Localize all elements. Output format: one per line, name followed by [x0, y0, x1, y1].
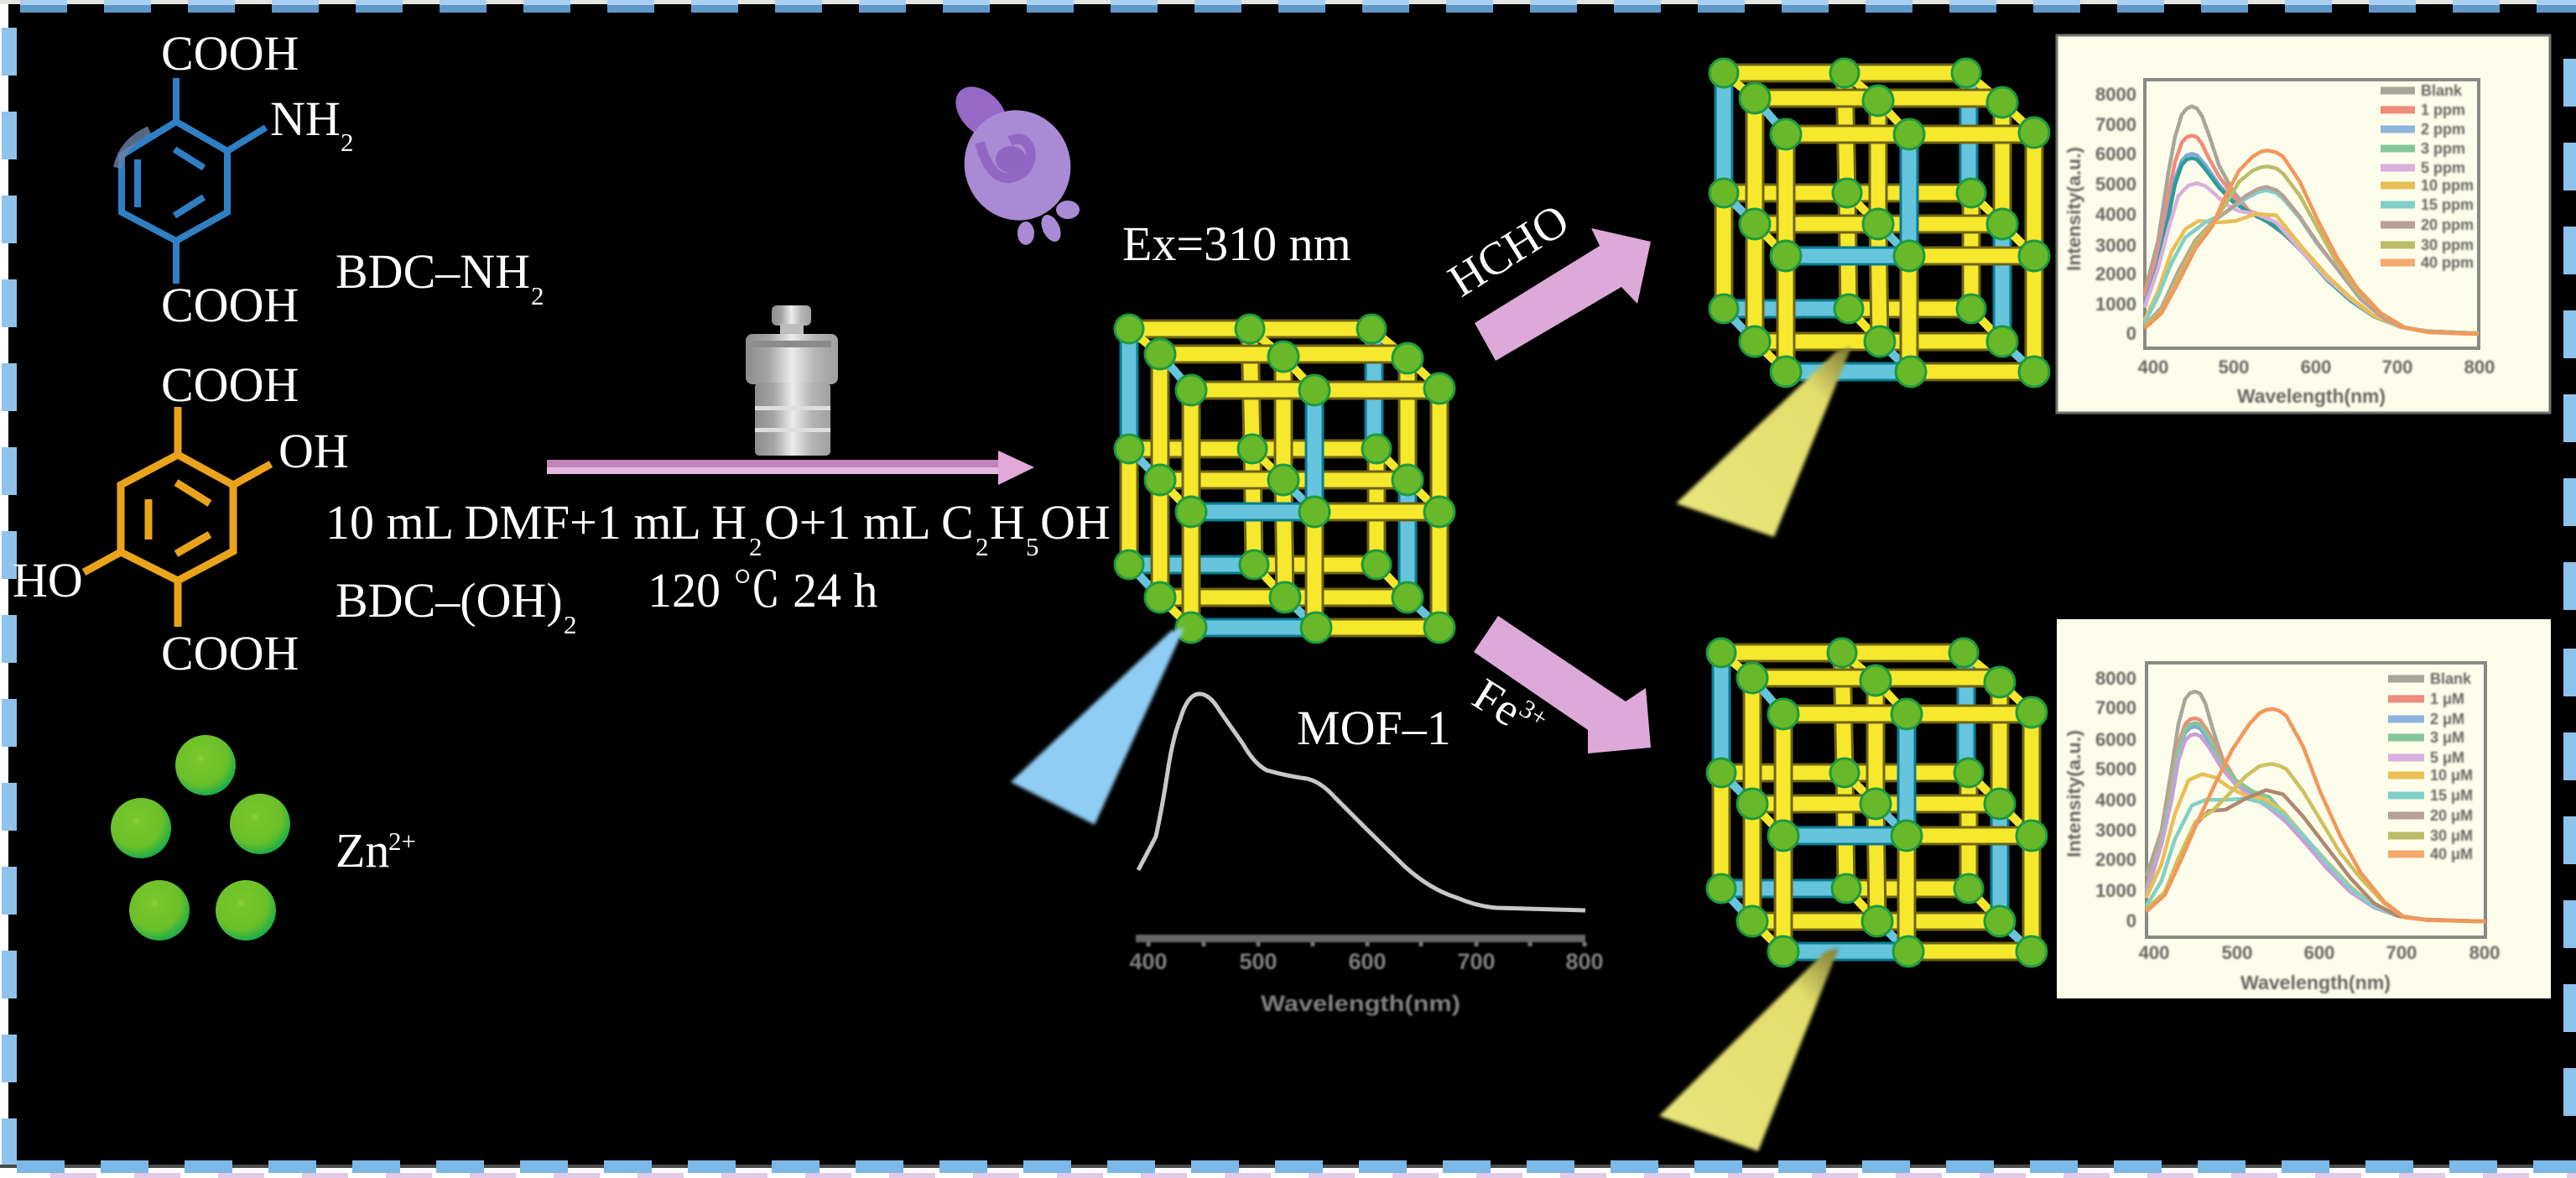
- icon: pressure weight: [746, 305, 838, 456]
- legend: 20 μM: [2430, 807, 2473, 824]
- label: Zn2+: 2+: [388, 826, 416, 856]
- x axis labels: 800: [2469, 942, 2500, 963]
- y axis labels: 7000: [2095, 697, 2136, 718]
- y axis labels: 4000: [2095, 204, 2136, 225]
- label: BDC-(OH)2: BDC–(OH): [336, 573, 563, 628]
- y axis labels: 0: [2126, 910, 2136, 931]
- chart panel: [2057, 35, 2550, 413]
- x axis title: Wavelength(nm): [2240, 972, 2391, 993]
- x axis labels: 600: [2301, 357, 2331, 378]
- legend: 20 ppm: [2421, 216, 2474, 233]
- y axis labels: 1000: [2095, 880, 2136, 901]
- label: excitation wavelength: Ex=310 nm: [1122, 216, 1351, 271]
- arrow: HCHO pink arrow: [1475, 228, 1651, 361]
- label: Fe3+: Fe: [1465, 668, 1531, 736]
- y axis labels: [2095, 84, 2136, 344]
- y axis labels: [2095, 668, 2136, 931]
- legend: 30 μM: [2430, 827, 2473, 844]
- text: synthesis conditions solvent: 10 mL DMF+1 mL H: [325, 495, 747, 550]
- chart: HCHO spectra: [2057, 35, 2550, 413]
- x axis labels: 800: [1565, 949, 1604, 974]
- x axis title: Wavelength(nm): [1261, 991, 1460, 1016]
- icon: purple UV lamp: [946, 77, 1086, 245]
- y axis labels: 3000: [2095, 235, 2136, 256]
- text: synthesis conditions solvent: 2: [976, 532, 988, 561]
- x axis labels: 500: [2219, 357, 2249, 378]
- x axis labels: 400: [1129, 949, 1168, 974]
- x axis labels: 500: [2222, 942, 2252, 963]
- legend: 40 μM: [2430, 846, 2473, 863]
- legend: 10 ppm: [2421, 177, 2474, 194]
- white spectrum curve: [1138, 694, 1585, 910]
- label: BDC-NH2: BDC–NH: [336, 244, 530, 299]
- label: NH2 substituent: NH: [270, 91, 341, 146]
- icon: blue emission cone: [1011, 628, 1184, 825]
- x axis labels: 600: [1348, 949, 1387, 974]
- panel: BDC-(OH)2 linker: [13, 357, 577, 680]
- spectra curves: [2145, 107, 2479, 334]
- legend: Blank: [2421, 82, 2463, 99]
- label: HO substituent: HO: [13, 553, 83, 607]
- text: synthesis conditions temperature and time: ℃: [732, 563, 781, 618]
- x axis labels: 400: [2138, 357, 2168, 378]
- y axis title: Intensity(a.u.): [2063, 147, 2084, 271]
- icon: blue benzene ring: [117, 78, 266, 284]
- text: synthesis conditions solvent: 2: [749, 532, 762, 561]
- label: NH2 substituent: 2: [341, 128, 354, 157]
- chart: Fe3+ spectra: [2057, 619, 2551, 998]
- x axis labels: 700: [2382, 357, 2412, 378]
- label: COOH top: COOH: [161, 26, 299, 81]
- label: HCHO: HCHO: [1439, 194, 1578, 306]
- arrow: synthesis reaction arrow: [547, 451, 1034, 485]
- y axis title: Intensity(a.u.): [2063, 730, 2084, 857]
- label: Zn2+: Zn: [336, 823, 389, 878]
- y axis labels: 8000: [2095, 668, 2136, 689]
- legend: 30 ppm: [2421, 237, 2474, 253]
- text: synthesis conditions temperature and time: 24 h: [793, 563, 877, 618]
- y axis labels: 7000: [2095, 114, 2136, 135]
- legend: 2 ppm: [2421, 121, 2465, 138]
- chart: MOF-1 emission spectrum: [1129, 694, 1604, 1016]
- x axis labels: [2138, 357, 2495, 378]
- x axis labels: 700: [1457, 949, 1496, 974]
- legend: 1 ppm: [2421, 102, 2465, 118]
- text: synthesis conditions solvent: O+1 mL C: [764, 495, 974, 550]
- legend: [2381, 82, 2474, 271]
- label: BDC-(OH)2: 2: [564, 610, 577, 639]
- legend: 10 μM: [2430, 767, 2473, 784]
- legend: 5 μM: [2430, 749, 2464, 766]
- y axis labels: 6000: [2095, 143, 2136, 164]
- y axis labels: 2000: [2095, 263, 2136, 284]
- label: Fe3+: 3+: [1515, 693, 1553, 733]
- MOF cube after HCHO: [1710, 59, 2049, 387]
- y axis labels: 5000: [2095, 174, 2136, 195]
- label: BDC-NH2: 2: [531, 281, 544, 310]
- text: synthesis conditions temperature and time: 120: [648, 563, 721, 618]
- y axis labels: 0: [2126, 323, 2136, 344]
- icon: yellow emission cone lower: [1659, 948, 1839, 1151]
- legend: 15 μM: [2430, 787, 2473, 804]
- y axis labels: 8000: [2095, 84, 2136, 105]
- arrow: Fe3+ pink arrow: [1474, 616, 1651, 753]
- label: MOF-1: MOF–1: [1297, 701, 1451, 755]
- spectra curves: [2147, 691, 2485, 921]
- legend: Blank: [2430, 670, 2472, 687]
- label: COOH bottom: COOH: [161, 278, 299, 332]
- x axis labels: 500: [1239, 949, 1278, 974]
- label: OH substituent: OH: [278, 424, 349, 478]
- legend: 1 μM: [2430, 691, 2464, 707]
- panel: Zn2+ ions: [111, 735, 416, 941]
- text: synthesis conditions solvent: 5: [1026, 532, 1038, 561]
- text: synthesis conditions solvent: OH: [1040, 495, 1111, 550]
- x axis labels: 700: [2386, 942, 2417, 963]
- y axis labels: 2000: [2095, 849, 2136, 870]
- legend: 3 μM: [2430, 729, 2464, 746]
- x axis labels: [1129, 949, 1604, 974]
- icon: orange benzene ring: [84, 407, 271, 627]
- y axis labels: 3000: [2095, 820, 2136, 841]
- icon: yellow emission cone upper: [1676, 347, 1851, 537]
- x axis: [1136, 935, 1585, 946]
- chart panel: [2057, 619, 2551, 998]
- y axis labels: 6000: [2095, 729, 2136, 750]
- panel: BDC-NH2 linker: [117, 26, 544, 332]
- plot frame: [2145, 80, 2479, 348]
- text: synthesis conditions solvent: H: [990, 495, 1025, 550]
- MOF cube after Fe3+: [1707, 639, 2047, 967]
- legend: 40 ppm: [2421, 254, 2474, 271]
- plot frame: [2147, 663, 2485, 937]
- legend: 15 ppm: [2421, 196, 2474, 213]
- legend: [2388, 670, 2473, 863]
- y axis labels: 5000: [2095, 758, 2136, 779]
- y axis labels: 1000: [2095, 294, 2136, 315]
- legend: 3 ppm: [2421, 140, 2465, 157]
- x axis labels: 400: [2139, 942, 2169, 963]
- MOF-1 cube framework: [1115, 315, 1455, 643]
- x axis labels: [2139, 942, 2500, 963]
- legend: 2 μM: [2430, 711, 2464, 727]
- x axis labels: 600: [2304, 942, 2334, 963]
- y axis labels: 4000: [2095, 790, 2136, 811]
- label: COOH bottom: COOH: [161, 626, 299, 680]
- x axis labels: 800: [2464, 357, 2495, 378]
- label: COOH top: COOH: [161, 357, 299, 412]
- legend: 5 ppm: [2421, 159, 2465, 176]
- x axis title: Wavelength(nm): [2237, 385, 2386, 407]
- icon: green zinc ion spheres: [111, 735, 290, 941]
